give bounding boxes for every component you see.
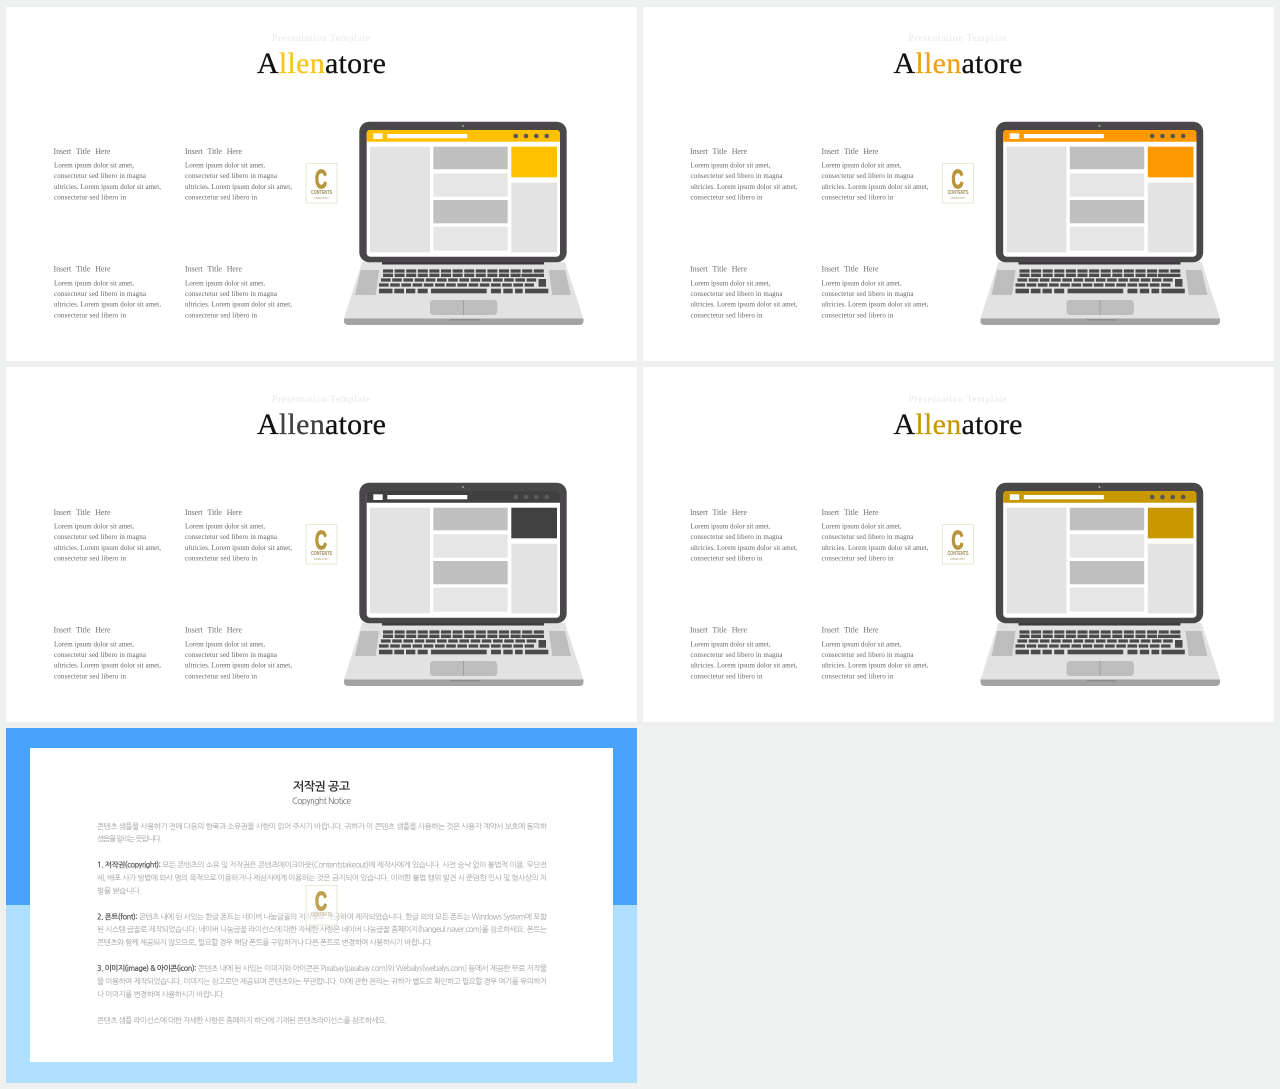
logo badge: C	[315, 164, 327, 194]
logo badge: CONTENTS	[948, 551, 969, 557]
text block: section 3 image and icon: 3. 이미지(image) & 아이콘(icon): 콘텐츠 내에 된 사있는 이미지와 아이콘은 Pixabay(pixabay.com)와 Webalys(webalys.com) 등에서 제공한 무료 저작물	[97, 964, 547, 973]
text block: top right: Lorem ipsum dolor sit amet,	[185, 522, 265, 530]
logo badge: MAKE COPY	[950, 557, 966, 561]
text block: bottom right	[185, 626, 292, 680]
text block: bottom right: Insert Title Here	[185, 626, 242, 634]
text block: top left: ultricies. Lorem ipsum dolor sit amet,	[690, 183, 798, 191]
text block: top left: Lorem ipsum dolor sit amet,	[690, 522, 771, 530]
text block: section 2 font: 2. 폰트(font): 콘텐츠 내에 된 서있는 한글 폰트는 네이버 나눔글꼴의 저작물로 제공하여 제작되었습니다. 한글 외의 모든 폰트는 Windows System에 포함	[97, 912, 548, 922]
text block: bottom right: consectetur sed libero in	[185, 672, 258, 680]
text block: top right: consectetur sed libero in	[822, 194, 894, 202]
subtitle: Presentation Template	[272, 395, 370, 405]
text block: top right: Insert Title Here	[185, 508, 242, 517]
text block: bottom left: Insert Title Here	[690, 626, 747, 634]
laptop illustration	[344, 483, 584, 686]
text block: top right: Lorem ipsum dolor sit amet,	[822, 522, 902, 530]
text block: bottom left: consectetur sed libero in	[690, 312, 763, 320]
logo badge	[942, 164, 974, 203]
text block: top left: consectetur sed libero in magna	[690, 172, 783, 180]
text block: top right: Insert Title Here	[822, 147, 879, 156]
text block: top right: ultricies. Lorem ipsum dolor sit amet,	[822, 183, 929, 191]
text block: section 3 image and icon	[97, 964, 547, 999]
text block: section 1 copyright	[97, 860, 547, 896]
heading: copyright subtitle: Copyright Notice	[292, 797, 351, 806]
text block: top left: Insert Title Here	[690, 147, 747, 156]
logo badge watermark: CONTENTS	[311, 912, 333, 918]
title: Allenatore	[257, 47, 386, 80]
text block: bottom right: Lorem ipsum dolor sit amet,	[185, 280, 265, 288]
subtitle: Presentation Template	[272, 34, 370, 44]
text block: bottom left: Insert Title Here	[54, 626, 111, 634]
laptop illustration	[980, 122, 1220, 325]
text block: bottom right: consectetur sed libero in magna	[185, 290, 278, 298]
title: Allenatore	[894, 408, 1022, 441]
title: Allenatore	[257, 408, 386, 441]
text block: bottom left	[690, 264, 798, 320]
text block: top left: ultricies. Lorem ipsum dolor sit amet,	[690, 544, 798, 552]
text block: intro: 콘텐츠 샘플을 사용하기 전에 다음의 항목과 소유권을 사항이 읽어 주시기 바랍니다. 귀하가 이 콘텐츠 샘플을 사용하는 것은 사용자 계약서 보호에 동의하	[97, 822, 548, 831]
logo badge: CONTENTS	[311, 190, 333, 196]
text block: top left: Lorem ipsum dolor sit amet,	[690, 162, 771, 170]
text block: bottom right: ultricies. Lorem ipsum dolor sit amet,	[185, 662, 292, 670]
panel: slide 1 yellow	[6, 7, 637, 361]
text block: top right: Lorem ipsum dolor sit amet,	[185, 162, 265, 170]
text block: top right	[185, 508, 292, 562]
text block: bottom right: Lorem ipsum dolor sit amet,	[185, 640, 265, 648]
text block: license note: 콘텐츠 샘플 라이선스에 대한 자세한 사항은 홈페이지 하단에 기재된 콘텐츠라이선스를 참조하세요.	[97, 1016, 387, 1025]
text block: top left: consectetur sed libero in	[54, 554, 126, 562]
subtitle: Presentation Template	[908, 34, 1006, 44]
text block: top left	[54, 508, 161, 562]
logo badge watermark	[306, 886, 337, 925]
text block: bottom left: Lorem ipsum dolor sit amet,	[690, 640, 771, 648]
text block: bottom left: ultricies. Lorem ipsum dolor sit amet,	[54, 662, 161, 670]
logo badge: CONTENTS	[948, 190, 969, 196]
panel: copyright notice	[6, 728, 637, 1083]
text block: top left: consectetur sed libero in	[54, 194, 126, 202]
text block: top right: consectetur sed libero in	[822, 554, 894, 562]
text block: section 2 font: 된 시스템 글꼴로 제작되었습니다. 네이버 나눔글꼴 라이선스에 대한 자세한 사항은 네이버 나눔글꼴 홈페이지(hangeul.naver.com)를 참조하세요. 폰트는	[97, 925, 547, 934]
text block: bottom right: consectetur sed libero in	[822, 312, 894, 320]
text block: bottom left	[54, 626, 161, 680]
text block: bottom left: consectetur sed libero in magna	[690, 290, 783, 298]
text block: top right	[822, 508, 929, 562]
text block: top left: consectetur sed libero in	[690, 194, 763, 202]
text block: bottom left: Lorem ipsum dolor sit amet,	[690, 280, 771, 288]
text block: bottom left	[54, 264, 161, 320]
text block: bottom right: Insert Title Here	[822, 626, 879, 634]
text block: bottom left: consectetur sed libero in magna	[690, 651, 783, 659]
text block: bottom right	[822, 264, 929, 320]
text block: top left	[690, 147, 798, 202]
text block: top right: ultricies. Lorem ipsum dolor sit amet,	[822, 544, 929, 552]
text block: top right	[822, 147, 929, 202]
logo badge: C	[952, 525, 964, 555]
text block: bottom left: ultricies. Lorem ipsum dolor sit amet,	[54, 300, 161, 308]
text block: section 1 copyright: 벌을 받습니다.	[97, 886, 142, 896]
text block: bottom right: consectetur sed libero in magna	[822, 651, 914, 659]
text block: bottom right: consectetur sed libero in	[185, 312, 258, 320]
text block: top left: ultricies. Lorem ipsum dolor sit amet,	[54, 183, 161, 191]
text block: top right	[185, 147, 292, 202]
text block: bottom left	[690, 626, 798, 680]
text block: top right: Insert Title Here	[822, 508, 879, 517]
text block: bottom left: consectetur sed libero in	[690, 672, 763, 680]
text block: bottom left: ultricies. Lorem ipsum dolor sit amet,	[690, 300, 798, 308]
text block: bottom right: consectetur sed libero in	[822, 672, 894, 680]
laptop illustration	[344, 122, 584, 325]
panel: slide 4 gold	[643, 367, 1274, 722]
text block: bottom right	[822, 626, 929, 680]
text block: bottom left: Insert Title Here	[690, 264, 747, 274]
text block: top left: Insert Title Here	[54, 508, 111, 517]
text block: top right: consectetur sed libero in magna	[185, 172, 278, 180]
logo badge	[306, 164, 337, 203]
logo badge: CONTENTS	[311, 551, 333, 557]
logo badge: C	[952, 164, 964, 194]
text block: bottom right: ultricies. Lorem ipsum dolor sit amet,	[822, 300, 929, 308]
text block: top right: Lorem ipsum dolor sit amet,	[822, 162, 902, 170]
text block: bottom left: consectetur sed libero in magna	[54, 651, 147, 659]
text block: top left	[690, 508, 798, 562]
text block: bottom right: consectetur sed libero in magna	[822, 290, 914, 298]
panel: slide 3 dark	[6, 367, 637, 722]
text block: bottom right: Lorem ipsum dolor sit amet,	[822, 280, 902, 288]
text block: bottom right: Insert Title Here	[822, 264, 879, 274]
logo badge: MAKE COPY	[314, 557, 329, 561]
text block: bottom right: consectetur sed libero in magna	[185, 651, 278, 659]
text block: top right: consectetur sed libero in magna	[822, 172, 914, 180]
text block: top right: ultricies. Lorem ipsum dolor sit amet,	[185, 183, 292, 191]
text block: bottom right: ultricies. Lorem ipsum dolor sit amet,	[185, 300, 292, 308]
text block: top left: Insert Title Here	[690, 508, 747, 517]
text block: bottom left: Lorem ipsum dolor sit amet,	[54, 640, 134, 648]
text block: bottom left: Insert Title Here	[54, 264, 111, 274]
text block: top left	[54, 147, 161, 202]
logo badge: MAKE COPY	[950, 196, 966, 200]
text block: top left: Lorem ipsum dolor sit amet,	[54, 162, 134, 170]
text block: bottom left: ultricies. Lorem ipsum dolor sit amet,	[690, 662, 798, 670]
text block: top left: Lorem ipsum dolor sit amet,	[54, 522, 134, 530]
text block: top right: Insert Title Here	[185, 147, 242, 156]
text block: bottom right: ultricies. Lorem ipsum dolor sit amet,	[822, 662, 929, 670]
text block: bottom left: consectetur sed libero in	[54, 672, 126, 680]
text block: bottom left: Lorem ipsum dolor sit amet,	[54, 280, 134, 288]
text block: top right: ultricies. Lorem ipsum dolor sit amet,	[185, 544, 292, 552]
text block: top right: consectetur sed libero in	[185, 194, 258, 202]
subtitle: Presentation Template	[908, 395, 1006, 405]
logo badge	[942, 524, 974, 564]
text block: bottom left: consectetur sed libero in	[54, 312, 126, 320]
text block: section 2 font: 콘텐츠와 함께 제공되지 않으므로, 필요할 경우 해당 폰트를 구입하거나 다른 폰트로 변경하여 사용하시기 바랍니다.	[97, 938, 433, 947]
text block: top left: consectetur sed libero in magna	[54, 172, 147, 180]
text block: top left: Insert Title Here	[54, 147, 111, 156]
logo badge: C	[315, 525, 327, 555]
title: Allenatore	[894, 47, 1022, 80]
text block: top right: consectetur sed libero in magna	[822, 533, 914, 541]
logo badge	[306, 524, 337, 564]
text block: bottom right	[185, 264, 292, 320]
text block: section 1 copyright: 세, 배포 사가 방법에 와서 명의 목적으로 이용하거나 제삼자에게 이용하는 것은 금지되어 있습니다. 이러한 불법 행위 발견 시 준엄한 민사 및 형사상의 처	[97, 874, 547, 882]
text block: bottom left: consectetur sed libero in magna	[54, 290, 147, 298]
logo badge watermark: C	[315, 886, 327, 916]
text block: top left: ultricies. Lorem ipsum dolor sit amet,	[54, 544, 161, 552]
text block: intro	[97, 822, 548, 844]
text block: section 1 copyright: 1. 저작권(copyright): 모든 콘텐츠의 소유 및 저작권은 콘텐츠메이크아웃(Contentstakeout)에 제작사에게 있습니다. 사전 승낙 없이 불법적 이용, 무단전	[97, 860, 547, 870]
text block: bottom right: Lorem ipsum dolor sit amet,	[822, 640, 902, 648]
text block: top left: consectetur sed libero in	[690, 554, 763, 562]
text block: bottom right: Insert Title Here	[185, 264, 242, 274]
text block: top right: consectetur sed libero in	[185, 554, 258, 562]
text block: section 3 image and icon: 을 이용하여 제작되었습니다. 이미지는 참고로만 제공되며 콘텐츠와는 무관합니다. 이에 관한 권리는 귀하가 별도로 확인하고 필요할 경우 여기를 유의하거	[97, 977, 547, 986]
laptop illustration	[980, 483, 1220, 686]
text block: top left: consectetur sed libero in magna	[54, 533, 147, 541]
text block: top right: consectetur sed libero in magna	[185, 533, 278, 541]
text block: section 3 image and icon: 나 이미지를 변경하여 사용하시기 바랍니다.	[97, 990, 225, 999]
text block: top left: consectetur sed libero in magna	[690, 533, 783, 541]
logo badge: MAKE COPY	[314, 196, 329, 200]
panel: slide 2 orange	[643, 7, 1274, 361]
text block: intro: 셨음을 알리는 뜻입니다.	[97, 834, 162, 844]
text block: section 2 font	[97, 912, 548, 947]
heading: copyright title: 저작권 공고	[293, 780, 351, 792]
